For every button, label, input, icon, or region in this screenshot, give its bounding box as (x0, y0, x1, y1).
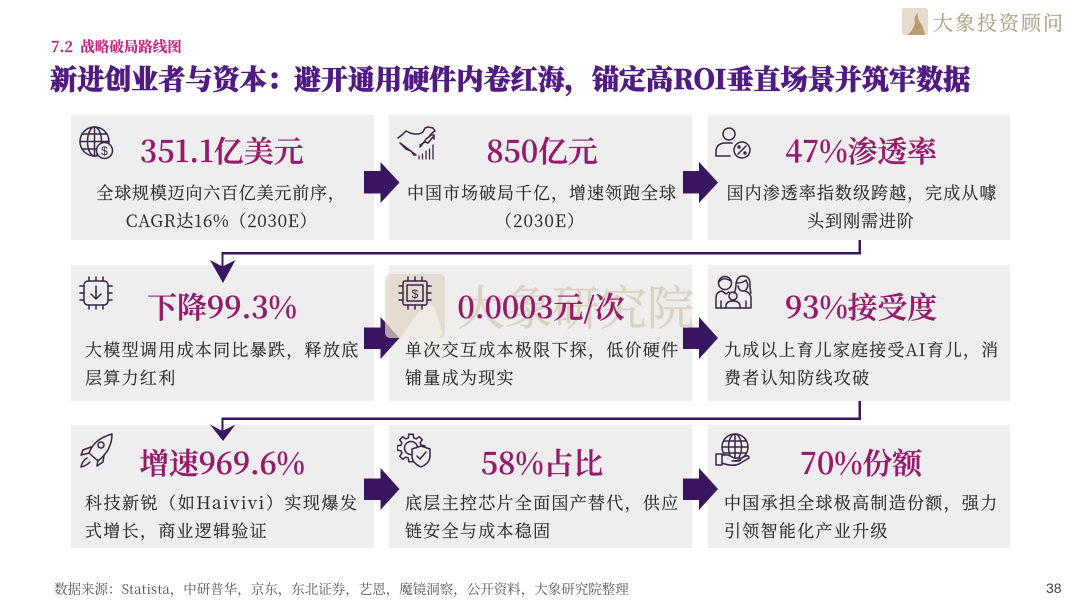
panel background: cost decline (71, 265, 374, 401)
panel background: global market (71, 115, 374, 240)
text: acceptance: 九成以上育儿家庭接受AI育儿，消 (724, 336, 999, 361)
stat: cost decline: 下降99.3% (147, 284, 297, 327)
icon: gear with shield (397, 434, 431, 468)
text: unit cost: 单次交互成本极限下探，低价硬件 (405, 336, 680, 361)
source note: 数据来源：Statista，中研普华，京东，东北证券，艺恩，魔镜洞察，公开资料，大象研究院整理 (54, 578, 629, 598)
text: penetration: 国内渗透率指数级跨越，完成从噱 (727, 179, 997, 204)
icon: chip with dollar (398, 276, 432, 310)
stat: growth: 增速969.6% (139, 440, 305, 483)
text: growth: 科技新锐（如Haivivi）实现爆发 (85, 489, 359, 514)
stat: chip share: 58%占比 (481, 440, 603, 483)
watermark: 大象研究院 (457, 270, 694, 339)
title: 新进创业者与资本：避开通用硬件内卷红海，锚定高ROI垂直场景并筑牢数据 (50, 58, 970, 97)
page number: 38 (1046, 580, 1062, 596)
arrow: row 3 card 2 to 3 (683, 468, 718, 510)
text: global market: 全球规模迈向六百亿美元前序， (96, 179, 346, 204)
icon: family (715, 275, 752, 309)
arrow: row 1 card 1 to 2 (364, 162, 400, 203)
icon: hand holding globe (715, 433, 750, 466)
panel background: acceptance (708, 265, 1010, 401)
text: global market line 2: CAGR达16%（2030E） (126, 207, 317, 232)
panel background: manufacturing share (708, 425, 1010, 548)
icon: rocket (80, 433, 113, 468)
panel background: growth (71, 425, 374, 548)
connector: row 2 to row 3 (210, 401, 861, 441)
text: China market line 2: （2030E） (495, 207, 585, 232)
connector: row 1 to row 2 (210, 240, 861, 283)
text: chip share: 底层主控芯片全面国产替代，供应 (405, 489, 680, 514)
section label: 7.2 战略破局路线图 (51, 36, 182, 57)
stat: global market: 351.1亿美元 (140, 128, 304, 171)
panel background: chip share (389, 425, 692, 548)
arrow: row 2 card 2 to 3 (683, 317, 718, 359)
text: cost decline line 2: 层算力红利 (85, 364, 176, 389)
arrow: row 1 card 2 to 3 (683, 162, 718, 203)
text: penetration line 2: 头到刚需进阶 (807, 207, 915, 232)
stat: manufacturing share: 70%份额 (800, 440, 922, 483)
text: manufacturing share line 2: 引领智能化产业升级 (724, 517, 889, 542)
icon: globe with dollar (79, 126, 114, 160)
panel background: unit cost (389, 265, 692, 401)
text: growth line 2: 式增长，商业逻辑验证 (85, 517, 268, 542)
arrow: row 3 card 1 to 2 (364, 468, 400, 510)
stat: penetration: 47%渗透率 (785, 128, 937, 171)
icon: China map with growth (397, 126, 436, 160)
text: acceptance line 2: 费者认知防线攻破 (724, 364, 870, 389)
logo: top right brand: 大象投资顾问 (933, 7, 1065, 36)
text: China market: 中国市场破局千亿，增速领跑全球 (407, 179, 677, 204)
icon: chip with dollar: $ (412, 287, 419, 301)
text: chip share line 2: 链安全与成本稳固 (405, 517, 551, 542)
stat: China market: 850亿元 (486, 128, 598, 171)
panel background: penetration (708, 115, 1010, 240)
icon: person with percent (715, 127, 751, 159)
text: manufacturing share: 中国承担全球极高制造份额，强力 (724, 489, 998, 514)
text: unit cost line 2: 铺量成为现实 (405, 364, 515, 389)
panel background: China market (389, 115, 692, 240)
text: cost decline: 大模型调用成本同比暴跌，释放底 (85, 336, 360, 361)
icon: chip with down arrow (79, 276, 113, 310)
stat: unit cost: 0.0003元/次 (458, 284, 624, 327)
stat: acceptance: 93%接受度 (785, 284, 937, 327)
arrow: row 2 card 1 to 2 (364, 317, 400, 359)
icon: globe with dollar: $ (101, 144, 108, 158)
